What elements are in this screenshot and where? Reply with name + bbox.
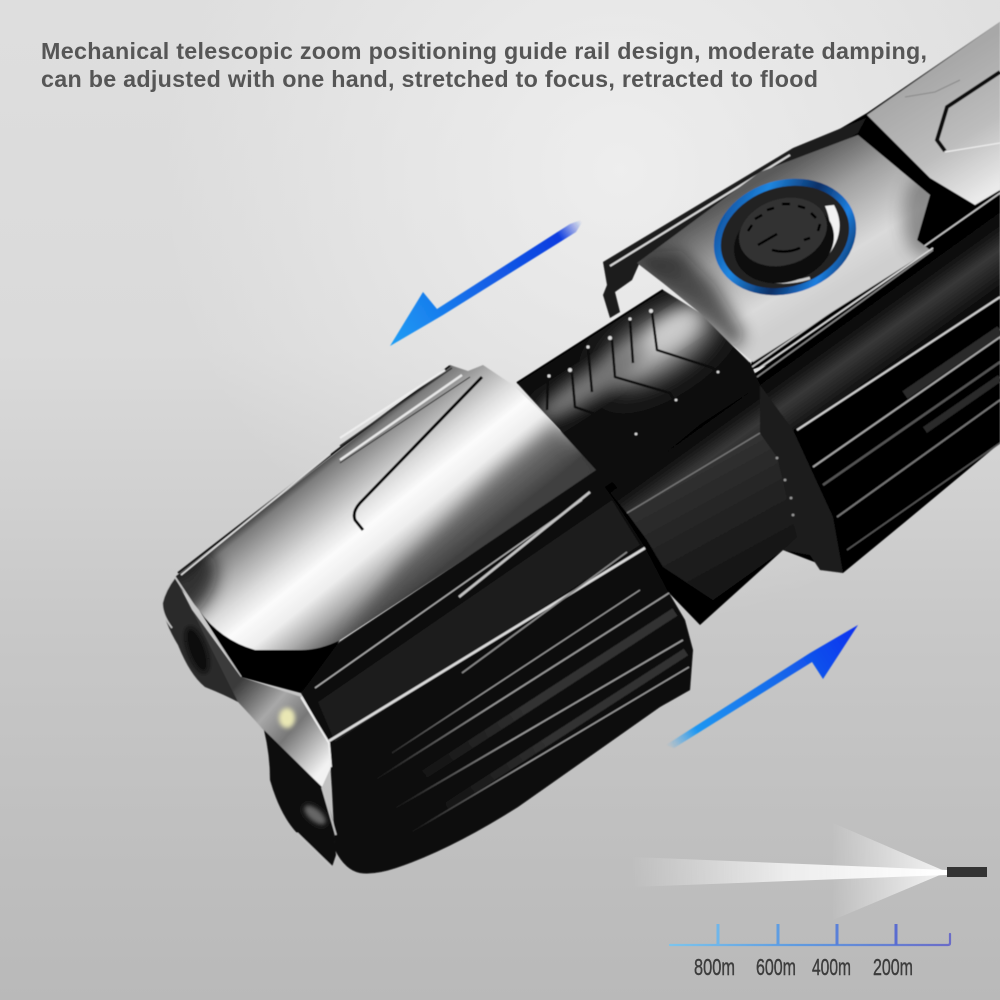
narrow spot beam: [633, 857, 947, 887]
heading text: Mechanical telescopic zoom positioning guide rail design, moderate damping,: [41, 38, 927, 64]
head silhouette and ribbed black body: [301, 470, 693, 873]
chevrons: [547, 312, 720, 437]
chrome slit: [354, 377, 482, 530]
center lens with LED: [192, 610, 331, 787]
heading text: [41, 38, 927, 92]
distance labels: 800m: [694, 954, 735, 980]
rear silver section with slot: [750, 22, 1000, 370]
left lens: [162, 577, 241, 702]
distance labels: 600m: [756, 954, 796, 980]
button cap: [723, 190, 845, 296]
wide flood beam: [833, 823, 947, 920]
flashlight: [153, 22, 1000, 873]
collar rim: [603, 118, 866, 318]
silver collar: [630, 135, 947, 362]
distance labels: 200m: [873, 954, 913, 980]
chrome rim lines: [178, 366, 470, 575]
distance axis: [670, 924, 950, 945]
mini flashlight: [947, 867, 987, 877]
rear black tube with fins: [590, 193, 1000, 625]
blue ring: [703, 165, 867, 309]
distance labels: [694, 954, 913, 980]
button symbols: [748, 204, 820, 252]
button socket: [812, 205, 840, 272]
arrow: zoom out direction: [390, 219, 584, 346]
arrow: zoom in direction: [666, 625, 858, 748]
lower dark panel band: [627, 385, 843, 600]
power button with blue ring: [703, 165, 867, 309]
telescoping head: [153, 365, 693, 873]
collar lower ridge: [600, 248, 933, 490]
chrome cap: [153, 365, 600, 650]
lower lens: [264, 730, 336, 867]
heading text: can be adjusted with one hand, stretched to focus, retracted to flood: [41, 66, 818, 92]
LED: [279, 708, 295, 728]
nose under chrome: [199, 610, 340, 693]
beam distance diagram: [633, 823, 987, 980]
distance labels: 400m: [812, 954, 851, 980]
neck with chevron grip: [517, 290, 760, 490]
